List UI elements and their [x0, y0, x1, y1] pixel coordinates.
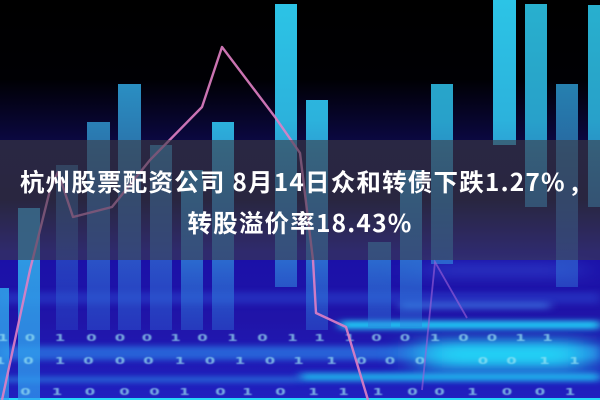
binary digits: 1010001010110000011	[0, 355, 580, 367]
light streaks at the bottom	[0, 264, 600, 400]
pink trend line	[2, 47, 368, 400]
title	[20, 164, 580, 240]
faint secondary line	[422, 262, 467, 390]
binary digits: 10100010101110010011	[0, 332, 553, 344]
binary digits	[0, 332, 580, 398]
title: 杭州股票配资公司 8月14日众和转债下跌1.27%,	[20, 164, 580, 199]
binary digits: 010001010111001001	[20, 386, 575, 398]
translucent title band	[0, 140, 600, 260]
title: 转股溢价率18.43%	[187, 205, 413, 240]
